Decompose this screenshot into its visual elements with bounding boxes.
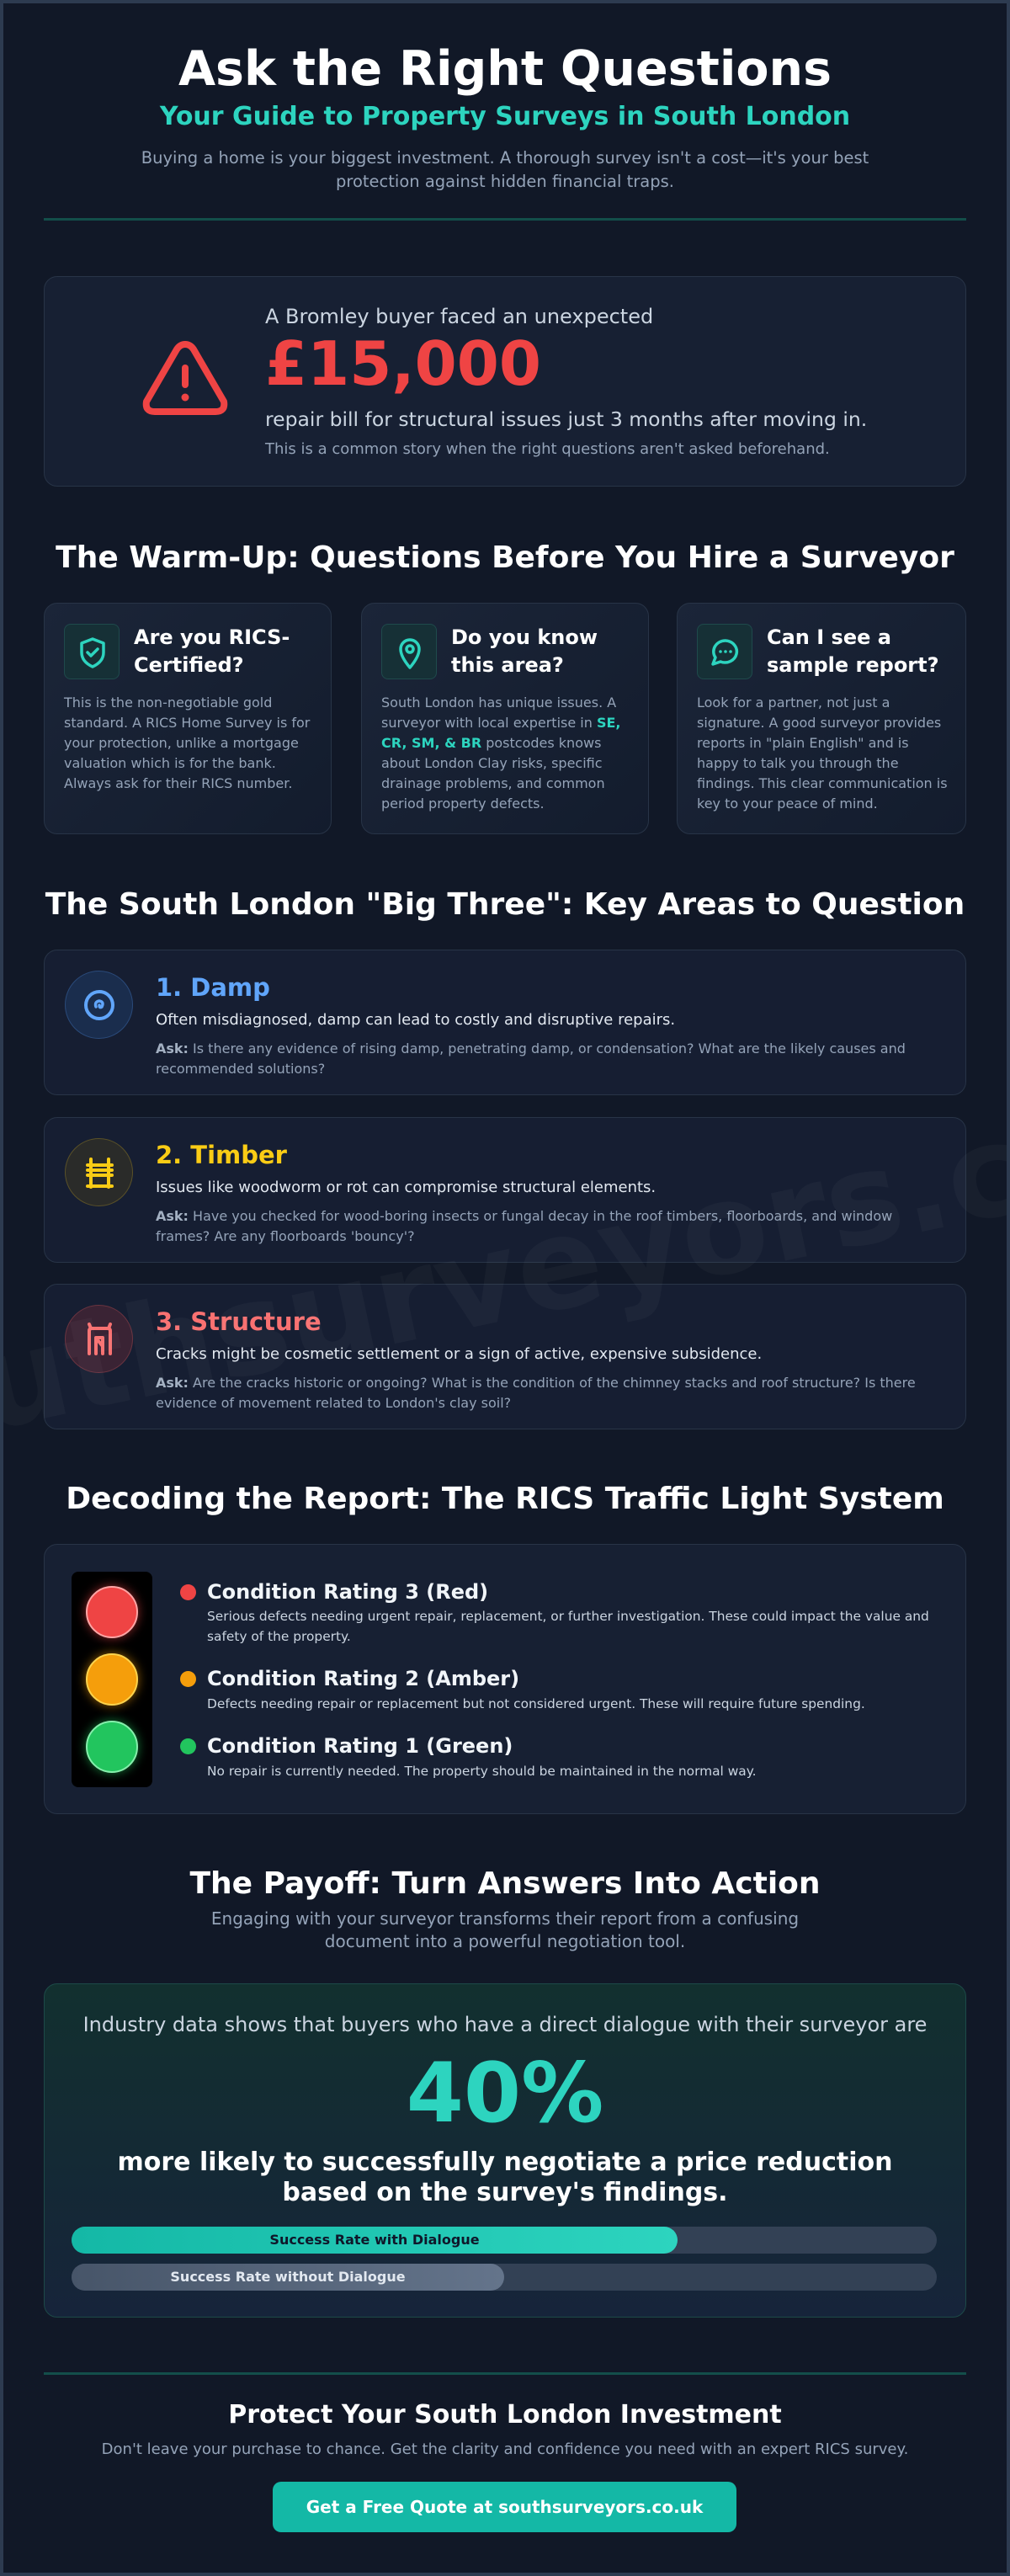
- panel: payoff stat: based on the survey's findings.: [282, 2178, 728, 2207]
- bar chart: [72, 2227, 937, 2291]
- panel: local area card: South London has unique issues. A surveyor with local expertise in SE, CR, SM, & BR postcodes knows about London Clay risks, specific drainage problems, and common period property defects.: [381, 695, 620, 812]
- heading: payoff: The Payoff: Turn Answers Into Action: [189, 1866, 821, 1901]
- rating 3: Condition Rating 3 (Red): [207, 1580, 488, 1604]
- rating 1: No repair is currently needed. The property should be maintained in the normal way.: [207, 1764, 757, 1779]
- footer heading: Protect Your South London Investment: [228, 2400, 782, 2430]
- panel: RICS card: This is the non-negotiable gold standard. A RICS Home Survey is for your protection, unlike a mortgage valuation which is for the bank. Always ask for their RICS number.: [64, 695, 310, 791]
- panel: sample report card: Can I see a sample report?: [767, 625, 939, 677]
- rating 2: [180, 1667, 865, 1711]
- panel: damp: Ask: Is there any evidence of rising damp, penetrating damp, or condensation? What are the likely causes and recommended solutions?: [156, 1041, 906, 1077]
- footer text: Don't leave your purchase to chance. Get the clarity and confidence you need with an expert RICS survey.: [102, 2440, 908, 2458]
- panel: timber: Issues like woodworm or rot can compromise structural elements.: [156, 1179, 656, 1196]
- rating 1: [180, 1734, 757, 1779]
- panel: payoff stat: [44, 1983, 966, 2318]
- icon: shield: [64, 624, 120, 679]
- bar chart: Success Rate with Dialogue: [269, 2232, 480, 2248]
- payoff subtitle: Engaging with your surveyor transforms their report from a confusing document into a powerful negotiation tool.: [211, 1908, 799, 1951]
- panel: structure: Ask: Are the cracks historic or ongoing? What is the condition of the chimney stacks and roof structure? Is there evidence of movement related to London's clay soil?: [156, 1375, 916, 1411]
- big stat: 40%: [407, 2046, 603, 2142]
- heading: big three: The South London "Big Three": Key Areas to Question: [45, 887, 965, 922]
- panel: payoff stat: Industry data shows that buyers who have a direct dialogue with their surveyor are: [83, 2013, 927, 2036]
- alert text: repair bill for structural issues just 3 months after moving in.: [265, 407, 867, 431]
- alert text: A Bromley buyer faced an unexpected: [265, 305, 653, 328]
- icon: damp: [65, 971, 133, 1039]
- icon: warning: [143, 341, 227, 415]
- CTA button: [273, 2482, 736, 2532]
- icon: traffic light: [72, 1572, 152, 1787]
- heading: warm-up: The Warm-Up: Questions Before You Hire a Surveyor: [56, 540, 954, 575]
- subtitle: Your Guide to Property Surveys in South London: [160, 102, 850, 131]
- panel: local area card: Do you know this area?: [451, 625, 598, 677]
- panel: timber: 2. Timber: [156, 1141, 287, 1169]
- rating 2: Condition Rating 2 (Amber): [207, 1667, 519, 1690]
- panel: structure: Cracks might be cosmetic settlement or a sign of active, expensive subsidence.: [156, 1345, 762, 1363]
- title: Ask the Right Questions: [178, 41, 832, 97]
- panel: payoff stat: more likely to successfully negotiate a price reduction: [118, 2148, 892, 2177]
- intro text: Buying a home is your biggest investment. A thorough survey isn't a cost—it's your best protection against hidden financial traps.: [141, 148, 869, 191]
- panel: structure: 3. Structure: [156, 1307, 322, 1336]
- panel: sample report card: [677, 603, 966, 834]
- bar chart: Success Rate without Dialogue: [170, 2269, 406, 2285]
- panel: timber: Ask: Have you checked for wood-boring insects or fungal decay in the roof timbers, floorboards, and window frames? Are any floorboards 'bouncy'?: [156, 1208, 892, 1244]
- panel: structure: [44, 1284, 966, 1429]
- panel: damp: 1. Damp: [156, 973, 270, 1002]
- panel: damp: [44, 950, 966, 1095]
- rating 3: Serious defects needing urgent repair, replacement, or further investigation. These could impact the value and safety of the property.: [207, 1609, 929, 1644]
- rating 2: Defects needing repair or replacement but not considered urgent. These will require future spending.: [207, 1696, 865, 1711]
- rating 1: Condition Rating 1 (Green): [207, 1734, 513, 1758]
- panel: timber: [44, 1117, 966, 1263]
- icon: pin: [381, 624, 437, 679]
- panel: local area card: [361, 603, 649, 834]
- icon: chat: [697, 624, 752, 679]
- alert text: [264, 305, 867, 458]
- panel: alert: [44, 276, 966, 487]
- panel: damp: Often misdiagnosed, damp can lead to costly and disruptive repairs.: [156, 1011, 675, 1029]
- panel: RICS card: [44, 603, 332, 834]
- panel: sample report card: Look for a partner, not just a signature. A good surveyor provides reports in "plain English" and is happy to talk you through the findings. This clear communication is key to your peace of mind.: [697, 695, 948, 812]
- icon: structure: [65, 1305, 133, 1373]
- panel: traffic light: [44, 1544, 966, 1814]
- alert text: £15,000: [265, 328, 541, 399]
- heading: traffic light: Decoding the Report: The RICS Traffic Light System: [66, 1482, 944, 1516]
- alert text: This is a common story when the right questions aren't asked beforehand.: [265, 440, 830, 458]
- CTA button: Get a Free Quote at southsurveyors.co.uk: [306, 2497, 703, 2517]
- rating 3: [180, 1580, 929, 1644]
- panel: RICS card: Are you RICS-Certified?: [134, 625, 290, 677]
- icon: timber: [65, 1138, 133, 1206]
